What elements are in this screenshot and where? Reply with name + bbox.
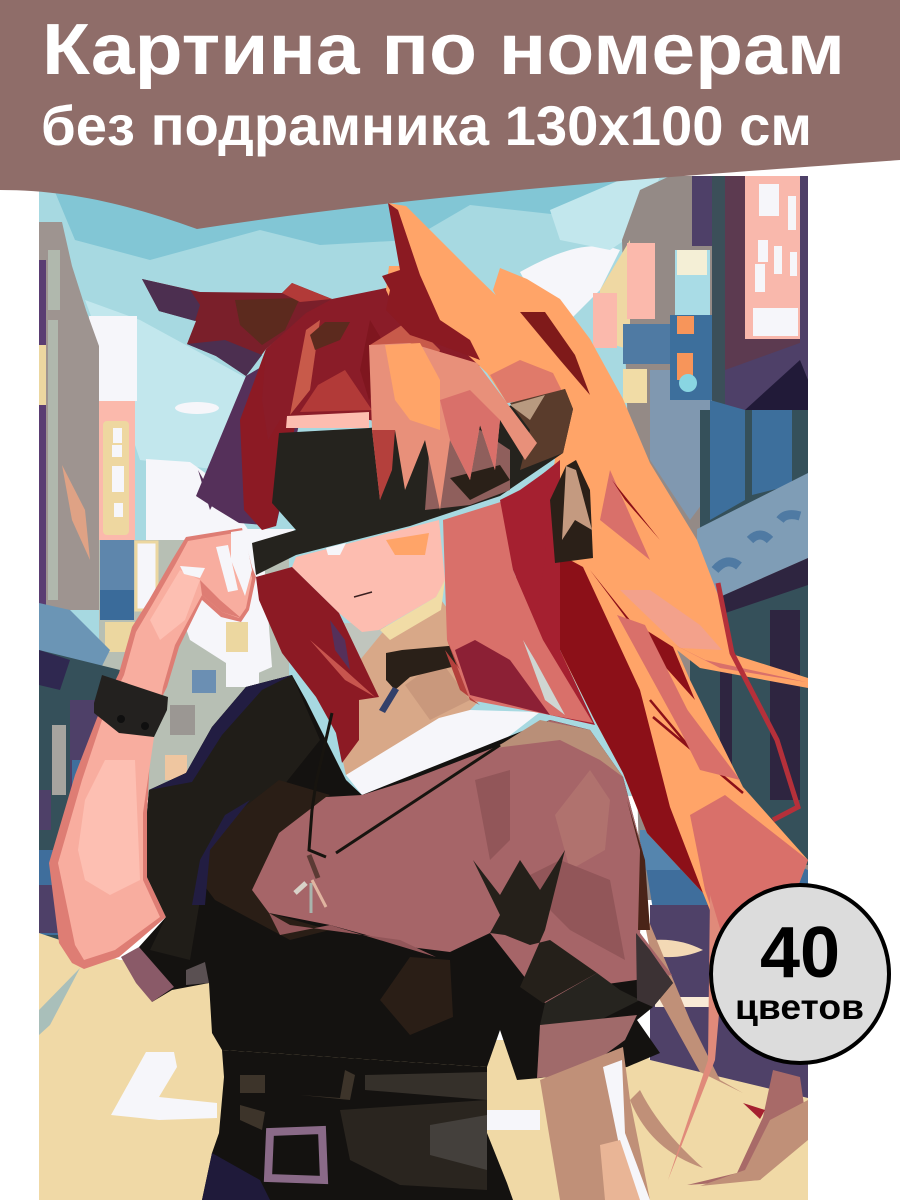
- background: right buildings: [593, 176, 808, 910]
- fingers highlight: [180, 530, 252, 596]
- sign: pink with yellow panel: [99, 401, 135, 540]
- title: Картина по номерам: [42, 10, 845, 90]
- ponytail: [493, 268, 808, 1186]
- ear left: [142, 279, 332, 376]
- arm, raised with hand: [49, 528, 295, 969]
- hair back, left side: [196, 349, 300, 530]
- sign: large pink: [745, 176, 800, 339]
- inlet and shading on chest: [269, 913, 436, 957]
- belt: [202, 1050, 513, 1200]
- hair fringe: [369, 343, 537, 510]
- blindfold: [252, 389, 573, 575]
- wristband: [94, 675, 168, 737]
- background: left tower: [39, 222, 99, 610]
- illustration: girl with blindfold on city street: [39, 176, 808, 1200]
- shirt folds: [473, 850, 597, 1003]
- shirt mauve front: [252, 720, 672, 1003]
- blindfold ribbon: [550, 460, 593, 563]
- belt buckle: [268, 1130, 324, 1180]
- background: lower left street: [39, 533, 386, 940]
- hair right of face: [443, 460, 595, 725]
- subtitle: без подрамника 130х100 см: [41, 94, 812, 157]
- hair cap: [262, 288, 480, 440]
- ground highlight: [111, 1052, 217, 1120]
- right arm: [540, 1047, 650, 1200]
- sign: street banner: [697, 473, 808, 607]
- header banner: [0, 0, 900, 229]
- neck: [343, 601, 478, 775]
- background: street ground: [39, 905, 808, 1200]
- ear right: [382, 203, 563, 403]
- hair front, left strands: [256, 567, 379, 763]
- cuff left: [121, 947, 174, 1002]
- shirt: [121, 675, 673, 1080]
- badge: 40 colours: 40: [760, 913, 840, 993]
- badge: 40 colours: цветов: [735, 988, 864, 1027]
- mouth: [354, 592, 372, 597]
- badge: 40 colours: [711, 885, 889, 1063]
- sleeve inner: [537, 1015, 637, 1078]
- collar highlight: [346, 710, 540, 795]
- necklace: [295, 713, 500, 913]
- background: sky: [39, 177, 668, 796]
- face: [292, 520, 445, 640]
- choker: [379, 645, 460, 713]
